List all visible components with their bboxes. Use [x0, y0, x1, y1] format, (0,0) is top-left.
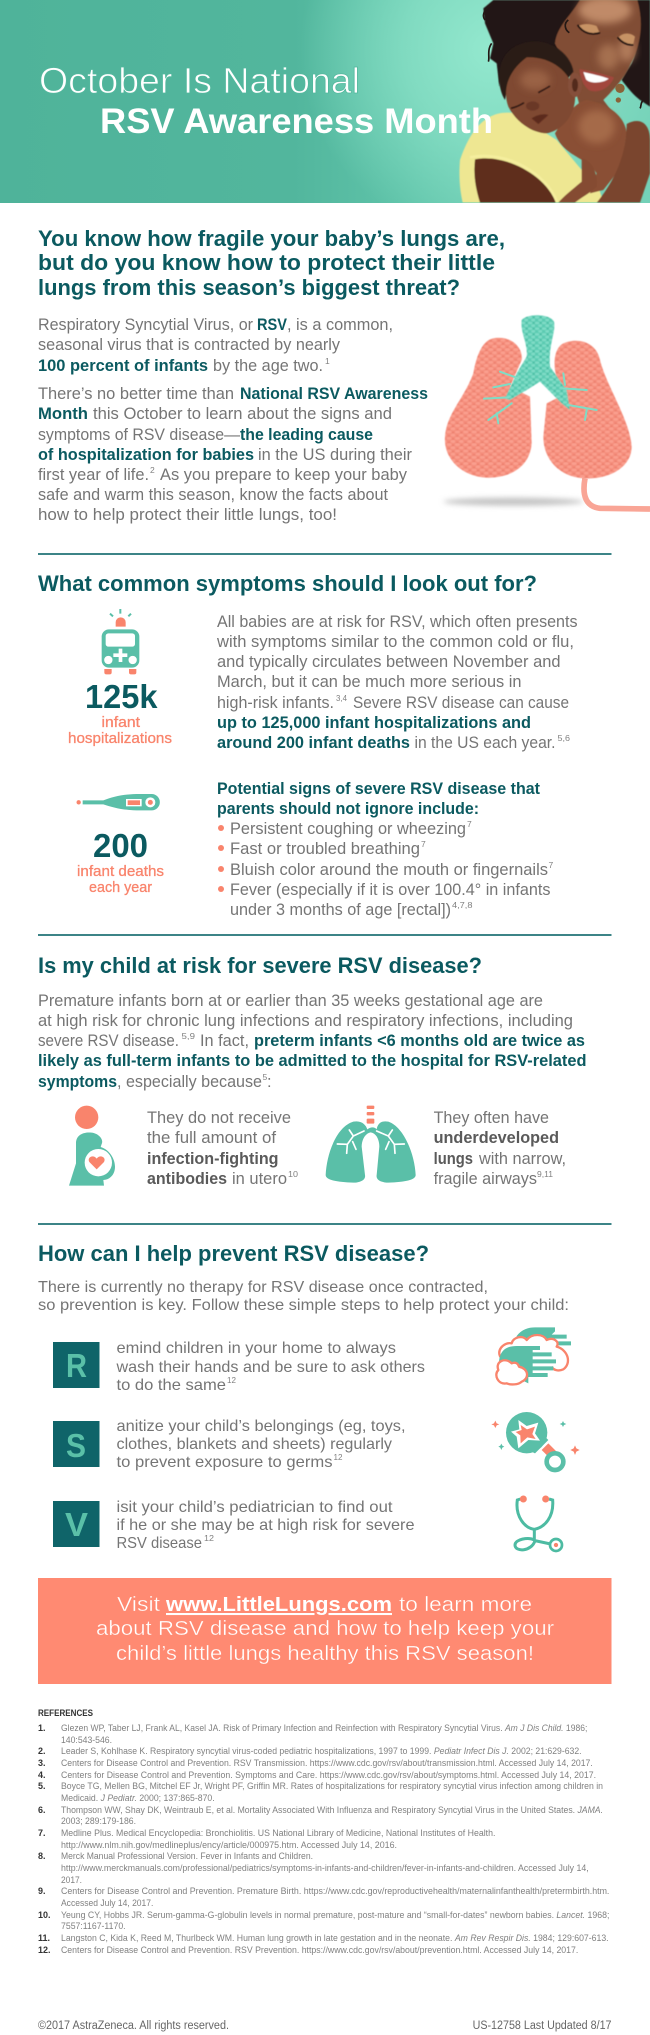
reference numbers: 8.	[38, 1851, 46, 1861]
reference list: Centers for Disease Control and Prevention. Symptoms and Care. https://www.cdc.gov/rsv/about/symptoms.html. Accessed July 14, 2017.	[61, 1770, 596, 1780]
intro paragraph 2: first year of life.	[38, 466, 149, 484]
callout: visit website: Visit	[117, 1593, 160, 1616]
icon: thermometer	[76, 794, 160, 810]
text: antibodies: antibodies	[147, 1170, 227, 1188]
intro paragraph 1: by the age two.	[213, 357, 323, 375]
reference list: http://www.merckmanuals.com/professional/pediatrics/symptoms-in-infants-and-children/fever-in-infants-and-children. Accessed July 14,	[61, 1863, 589, 1873]
icon: lungs	[326, 1106, 416, 1183]
callout: visit website: to learn more	[399, 1593, 532, 1616]
reference list: Accessed July 14, 2017.	[61, 1898, 153, 1908]
intro paragraph 2: 2	[150, 465, 155, 475]
reference numbers: 2.	[38, 1746, 46, 1756]
reference numbers: 7.	[38, 1828, 46, 1838]
reference numbers	[38, 1723, 51, 1955]
intro paragraph 1: RSV	[257, 316, 287, 334]
list: potential signs of severe RSV disease: 7	[421, 839, 426, 849]
stat: 125k infant hospitalizations	[68, 678, 172, 747]
text: symptoms paragraph: March, but it can be much more serious in	[217, 673, 522, 691]
stat: 200 infant deaths each year: each year	[89, 879, 152, 896]
reference numbers: 11.	[38, 1933, 50, 1943]
text: risk paragraph: Premature infants born at or earlier than 35 weeks gestational age are	[38, 992, 543, 1010]
text: symptoms paragraph: 5,6	[558, 733, 570, 743]
divider	[38, 934, 612, 936]
risk heading: Is my child at risk for severe RSV disease?	[38, 953, 482, 978]
text: risk paragraph: preterm infants <6 months old are twice as	[254, 1032, 585, 1050]
reference list: 2003; 289:179-186.	[61, 1816, 136, 1826]
text: sanitize: anitize your child’s belongings (eg, toys,	[116, 1418, 406, 1435]
text: underdeveloped lungs: underdeveloped	[434, 1129, 559, 1147]
footer: US-12758 Last Updated 8/17	[473, 2020, 612, 2032]
text: symptoms paragraph: around 200 infant deaths	[217, 734, 410, 752]
intro paragraph 1: 1	[325, 356, 330, 366]
reference list: Merck Manual Professional Version. Fever in Infants and Children.	[61, 1851, 313, 1861]
reference list: Langston C, Kida K, Reed M, Thurlbeck WM. Human lung growth in late gestation and in the neonate. Am Rev Respir Dis. 1984; 129:607-613.	[61, 1933, 609, 1943]
references heading: REFERENCES	[38, 1708, 93, 1718]
reference numbers: 9.	[38, 1886, 46, 1896]
stat: 125k infant hospitalizations: 125k	[85, 678, 158, 715]
reference list: http://www.nlm.nih.gov/medlineplus/ency/article/000975.htm. Accessed July 14, 2016.	[61, 1840, 397, 1850]
intro paragraph 1: 100 percent of infants	[38, 357, 208, 375]
reference numbers: 4.	[38, 1770, 46, 1780]
intro paragraph 1	[38, 316, 393, 375]
reference numbers: 12.	[38, 1945, 51, 1955]
callout: visit website: about RSV disease and how to help keep your	[96, 1617, 554, 1640]
text: antibodies: the full amount of	[147, 1129, 276, 1147]
intro paragraph 2: in the US during their	[258, 446, 412, 464]
text: remind: emind children in your home to always	[116, 1340, 396, 1357]
intro paragraph 2: how to help protect their little lungs, too!	[38, 506, 337, 524]
text: visit: RSV disease	[116, 1535, 202, 1552]
text: symptoms paragraph: with symptoms similar to the common cold or flu,	[216, 633, 574, 651]
image: crocheted lungs	[443, 315, 650, 509]
list: potential signs of severe RSV disease: Potential signs of severe RSV disease that	[217, 780, 540, 798]
intro paragraph 2: As you prepare to keep your baby	[160, 466, 408, 484]
prevention heading: How can I help prevent RSV disease?	[38, 1241, 429, 1266]
text: underdeveloped lungs: They often have	[434, 1109, 549, 1127]
reference list: Thompson WW, Shay DK, Weintraub E, et al. Mortality Associated With Influenza and Respiratory Syncytial Virus in the United States. JAMA.	[61, 1805, 603, 1815]
intro paragraph 2: symptoms of RSV disease—	[38, 426, 240, 444]
text: remind	[115, 1340, 425, 1394]
icon: washing hands	[496, 1327, 571, 1384]
text: underdeveloped lungs	[434, 1109, 566, 1188]
text: symptoms paragraph	[216, 613, 578, 752]
letter box R	[53, 1342, 100, 1388]
reference list: Yeung CY, Hobbs JR. Serum-gamma-G-globulin levels in normal premature, post-mature and “small-for-dates” newborn babies. Lancet. 1968;	[61, 1910, 609, 1920]
callout: visit website: www.LittleLungs.com	[165, 1593, 392, 1616]
divider	[38, 553, 612, 555]
icon: baby rattle	[491, 1412, 580, 1470]
text: sanitize: to prevent exposure to germs	[116, 1454, 332, 1471]
text: underdeveloped lungs: fragile airways	[434, 1170, 537, 1188]
text: remind: to do the same	[116, 1377, 226, 1394]
references	[38, 1708, 609, 1955]
list: potential signs of severe RSV disease: 7	[548, 860, 554, 870]
reference numbers: 3.	[38, 1758, 46, 1768]
list: potential signs of severe RSV disease: parents should not ignore include:	[217, 800, 479, 818]
text: sanitize: clothes, blankets and sheets) regularly	[116, 1436, 392, 1453]
text: antibodies: They do not receive	[147, 1109, 291, 1127]
intro heading: You know how fragile your baby’s lungs are,	[38, 226, 505, 251]
reference list: Boyce TG, Mellen BG, Mitchel EF Jr, Wright PF, Griffin MR. Rates of hospitalizations for respiratory syncytial virus infection among children in	[61, 1781, 603, 1791]
intro paragraph 2	[38, 385, 428, 524]
text: underdeveloped lungs: with narrow,	[478, 1150, 566, 1168]
intro paragraph 1: seasonal virus that is contracted by nearly	[38, 336, 341, 354]
text: prevention intro	[38, 1279, 569, 1314]
reference list: 7557:1167-1170.	[61, 1921, 126, 1931]
reference list: Leader S, Kohlhase K. Respiratory syncytial virus-coded pediatric hospitalizations, 1997 to 1999. Pediatr Infect Dis J. 2002; 21:629-632.	[61, 1746, 582, 1756]
list: potential signs of severe RSV disease	[217, 780, 554, 919]
intro paragraph 2: safe and warm this season, know the facts about	[38, 486, 388, 504]
list: potential signs of severe RSV disease: 4,7,8	[452, 900, 473, 910]
title: October Is National	[39, 60, 360, 101]
text: symptoms paragraph: in the US each year.	[414, 734, 556, 752]
reference list	[61, 1723, 609, 1955]
text: risk paragraph: 5,9	[182, 1031, 195, 1041]
reference numbers: 5.	[38, 1781, 46, 1791]
list: potential signs of severe RSV disease: Fast or troubled breathing	[230, 840, 420, 858]
reference numbers: 6.	[38, 1805, 46, 1815]
list: potential signs of severe RSV disease: Fever (especially if it is over 100.4° in infants	[230, 881, 550, 899]
reference list: Medline Plus. Medical Encyclopedia: Bronchiolitis. US National Library of Medicine, National Institutes of Health.	[61, 1828, 495, 1838]
letter box S: S	[66, 1427, 86, 1464]
intro paragraph 2: of hospitalization for babies	[38, 446, 254, 464]
reference list: Medicaid. J Pediatr. 2000; 137:865-870.	[61, 1793, 215, 1803]
text: visit: 12	[204, 1533, 214, 1543]
text: risk paragraph: , especially because	[117, 1073, 262, 1091]
step V: visit	[53, 1495, 562, 1552]
step R: remind	[53, 1327, 571, 1394]
intro paragraph 2: National RSV Awareness	[240, 385, 428, 403]
header banner	[0, 0, 650, 203]
photo: mother holding baby	[459, 0, 650, 203]
symptoms heading: What common symptoms should I look out for?	[38, 571, 537, 596]
intro paragraph 2: this October to learn about the signs and	[93, 405, 392, 423]
text: antibodies	[147, 1109, 298, 1188]
text: visit: if he or she may be at high risk for severe	[116, 1517, 415, 1534]
text: sanitize	[116, 1418, 406, 1471]
text: risk paragraph: at high risk for chronic lung infections and respiratory infections, including	[38, 1012, 573, 1030]
icon: ambulance	[102, 609, 139, 674]
footer	[38, 2020, 612, 2032]
reference numbers: 10.	[38, 1910, 51, 1920]
stat: 200 infant deaths each year	[77, 827, 164, 896]
text: symptoms paragraph: 3,4	[336, 693, 347, 703]
intro paragraph 2: There’s no better time than	[38, 385, 234, 403]
text: antibodies: in utero	[232, 1170, 287, 1188]
list: potential signs of severe RSV disease: Bluish color around the mouth or fingernails	[230, 861, 548, 879]
text: risk paragraph: In fact,	[200, 1032, 249, 1050]
step S: sanitize	[53, 1412, 580, 1471]
text: symptoms paragraph: Severe RSV disease can cause	[353, 694, 569, 712]
text: risk paragraph	[38, 992, 586, 1091]
text: risk paragraph: 5	[262, 1072, 268, 1082]
text: symptoms paragraph: up to 125,000 infant hospitalizations and	[217, 714, 531, 732]
reference list: Centers for Disease Control and Prevention. RSV Prevention. https://www.cdc.gov/rsv/about/prevention.html. Accessed July 14, 2017.	[61, 1945, 578, 1955]
text: visit: isit your child’s pediatrician to find out	[116, 1499, 393, 1516]
text: symptoms paragraph: high-risk infants.	[217, 694, 334, 712]
callout: visit website: child’s little lungs healthy this RSV season!	[116, 1642, 534, 1665]
intro paragraph 1: , is a common,	[287, 316, 393, 334]
title	[39, 60, 493, 141]
text: antibodies: infection-fighting	[147, 1150, 278, 1168]
letter box S	[53, 1421, 100, 1467]
text: antibodies: 10	[288, 1169, 298, 1179]
callout: visit website	[38, 1578, 612, 1684]
reference list: Glezen WP, Taber LJ, Frank AL, Kasel JA. Risk of Primary Infection and Reinfection with Respiratory Syncytial Virus. Am J Dis Child. 1986;	[61, 1723, 587, 1733]
intro heading	[38, 226, 505, 300]
intro heading: lungs from this season’s biggest threat?	[38, 275, 460, 300]
reference list: Centers for Disease Control and Prevention. RSV Transmission. https://www.cdc.gov/rsv/about/transmission.html. Accessed July 14, 2017.	[61, 1758, 593, 1768]
letter box R: R	[66, 1347, 87, 1384]
letter box V	[53, 1501, 100, 1547]
intro heading: but do you know how to protect their little	[38, 250, 495, 275]
text: risk paragraph: severe RSV disease.	[38, 1032, 179, 1050]
text: visit	[116, 1499, 415, 1552]
stat: 125k infant hospitalizations: infant	[102, 714, 141, 731]
reference list: Centers for Disease Control and Prevention. Premature Birth. https://www.cdc.gov/reproductivehealth/maternalinfanthealth/pretermbirth.htm.	[61, 1886, 609, 1896]
text: risk paragraph: :	[267, 1073, 272, 1091]
letter box V: V	[65, 1506, 88, 1543]
footer: ©2017 AstraZeneca. All rights reserved.	[38, 2020, 229, 2032]
text: symptoms paragraph: and typically circulates between November and	[217, 653, 560, 671]
reference numbers: 1.	[38, 1723, 46, 1733]
text: prevention intro: so prevention is key. Follow these simple steps to help protect your child:	[38, 1297, 569, 1314]
text: risk paragraph: likely as full-term infants to be admitted to the hospital for RSV-related	[38, 1052, 586, 1070]
text: underdeveloped lungs: lungs	[434, 1150, 473, 1168]
reference list: 2017.	[61, 1875, 82, 1885]
list: potential signs of severe RSV disease: 7	[467, 819, 472, 829]
text: prevention intro: There is currently no therapy for RSV disease once contracted,	[38, 1279, 488, 1296]
stat: 125k infant hospitalizations: hospitalizations	[68, 730, 172, 747]
list: potential signs of severe RSV disease: under 3 months of age [rectal])	[230, 901, 451, 919]
text: remind: wash their hands and be sure to ask others	[115, 1359, 425, 1376]
icon: stethoscope	[515, 1495, 562, 1551]
intro paragraph 2: Month	[38, 405, 88, 423]
text: symptoms paragraph: All babies are at risk for RSV, which often presents	[217, 613, 578, 631]
text: remind: 12	[227, 1375, 236, 1385]
text: risk paragraph: symptoms	[38, 1073, 117, 1091]
intro paragraph 1: Respiratory Syncytial Virus, or	[38, 316, 253, 334]
icon: pregnant mother	[69, 1106, 115, 1186]
stat: 200 infant deaths each year: infant deaths	[77, 863, 164, 880]
stat: 200 infant deaths each year: 200	[93, 827, 148, 864]
text: underdeveloped lungs: 9,11	[537, 1169, 553, 1179]
title: RSV Awareness Month	[100, 102, 493, 141]
intro paragraph 2: the leading cause	[240, 426, 373, 444]
reference list: 140:543-546.	[61, 1735, 112, 1745]
list: potential signs of severe RSV disease: Persistent coughing or wheezing	[230, 820, 466, 838]
divider	[38, 1223, 612, 1225]
text: sanitize: 12	[334, 1452, 343, 1462]
